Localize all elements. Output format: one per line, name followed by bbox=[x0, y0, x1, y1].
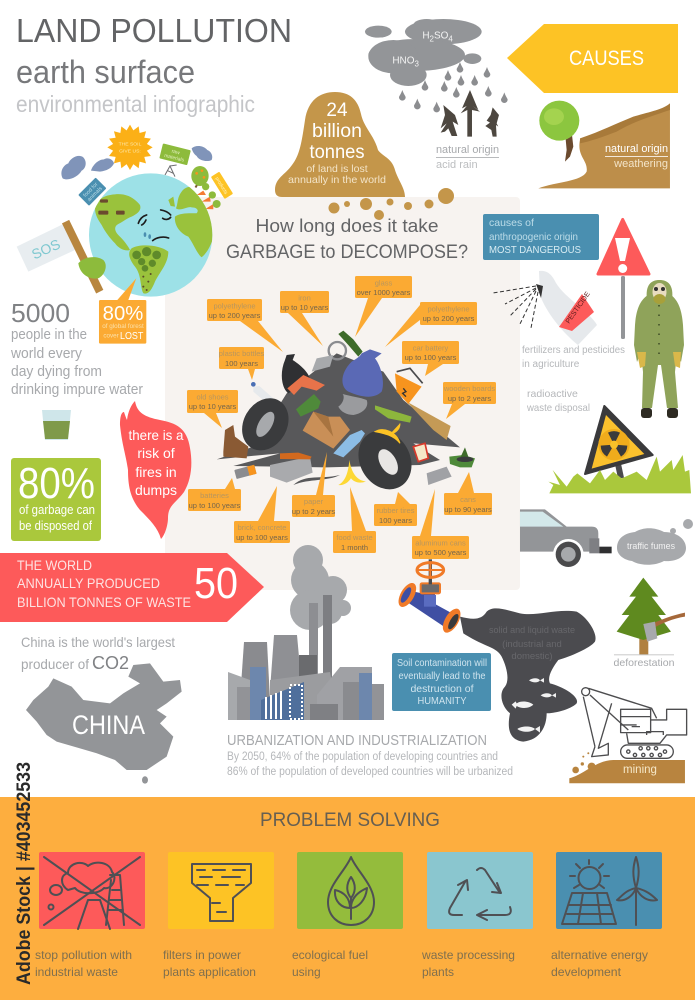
label: glass: over 1000 years bbox=[357, 288, 411, 297]
callout: 24 billion tonnes pile: tonnes bbox=[310, 142, 364, 163]
card: ecological fuel bbox=[292, 852, 403, 979]
caption: solid and liquid waste: solid and liquid waste bbox=[489, 625, 575, 636]
callout: 24 billion tonnes pile bbox=[275, 92, 454, 220]
flame: risk of fires: dumps bbox=[135, 482, 177, 498]
bricks bbox=[287, 375, 325, 395]
wooden boards bbox=[407, 402, 451, 440]
card: waste processing: plants bbox=[422, 965, 454, 979]
chemical formulas: SO bbox=[434, 31, 449, 42]
cattle bbox=[98, 199, 125, 215]
panel: soil contamination bbox=[392, 653, 491, 711]
panel heading: how long does it take: How long does it take bbox=[256, 216, 438, 236]
text: 5000 people bbox=[10, 298, 143, 398]
text: urbanization and industrialization: 86% of the population of developed countries will be urbanized bbox=[227, 766, 513, 778]
caption: radioactive waste disposal bbox=[526, 388, 590, 414]
card: waste processing: waste processing bbox=[421, 948, 515, 962]
banana on pile bbox=[375, 423, 400, 443]
panel: garbage decompose background bbox=[165, 197, 520, 590]
chemical formulas: 4 bbox=[448, 34, 453, 43]
panel: problem solving bbox=[0, 797, 695, 1000]
card: alternative energy bbox=[551, 852, 662, 979]
flame: risk of fires: fires in bbox=[135, 464, 177, 480]
panel heading: how long does it take bbox=[226, 216, 468, 263]
forest on south america bbox=[132, 247, 161, 272]
dead trees bbox=[441, 90, 499, 137]
icon: sun with text: THE SOIL bbox=[119, 142, 142, 148]
icon: radioactive sign in grass bbox=[548, 406, 691, 493]
label: paper: paper bbox=[304, 497, 324, 506]
plastic bottle bbox=[333, 430, 365, 457]
illustration: sad earth globe bbox=[17, 125, 233, 344]
green bottle bbox=[375, 405, 412, 423]
icon: pesticide spray bottle bbox=[493, 271, 597, 345]
panel: 80 percent garbage: of garbage can bbox=[19, 502, 95, 517]
callout: 24 billion tonnes pile: billion bbox=[312, 121, 362, 142]
sign: raw materials: raw bbox=[171, 149, 181, 156]
label: iron: up to 10 years bbox=[281, 303, 329, 312]
panel: causes of anthropogenic origin: MOST DANGEROUS bbox=[489, 244, 581, 256]
80 percent forest callout bbox=[99, 278, 146, 344]
label: rubber tires: 100 years bbox=[379, 516, 412, 525]
80 percent forest callout: 80% bbox=[103, 302, 143, 325]
label: brick, concrete bbox=[234, 486, 290, 543]
icon: oil derrick bbox=[165, 165, 177, 177]
caption: solid and liquid waste: (industrial and bbox=[502, 639, 562, 650]
caption: fertilizers and pesticides: in agriculture bbox=[522, 359, 580, 370]
card: waste processing bbox=[421, 852, 533, 979]
green open can bbox=[449, 447, 475, 467]
blue plastic bag bbox=[342, 349, 383, 397]
caption: natural origin acid rain: natural origin bbox=[436, 144, 499, 156]
card: ecological fuel: using bbox=[292, 965, 321, 979]
illustration: mining excavator bbox=[569, 688, 687, 783]
icon: blue clouds bbox=[61, 146, 212, 179]
text: urbanization and industrialization bbox=[227, 733, 513, 778]
banana peel bbox=[338, 460, 366, 485]
label: plastic bottles bbox=[219, 347, 264, 380]
sign: food for animals: food for bbox=[82, 182, 100, 199]
illustration: acid rain bbox=[365, 19, 508, 137]
80 percent forest callout: of global forest bbox=[102, 323, 144, 330]
label: batteries: up to 100 years bbox=[189, 501, 241, 510]
caption: solid and liquid waste: domestic) bbox=[511, 651, 553, 662]
crushed aluminum can bbox=[427, 467, 452, 485]
watermark: stock id: Adobe Stock | #403452533 bbox=[14, 762, 35, 985]
rain drops bbox=[399, 62, 508, 112]
title: environmental infographic bbox=[16, 91, 255, 117]
map: China bbox=[26, 663, 182, 784]
label: food waste: 1 month bbox=[341, 543, 368, 552]
caption: fertilizers and pesticides bbox=[522, 345, 625, 370]
card: ecological fuel: ecological fuel bbox=[292, 948, 368, 962]
label: aluminum cans: up to 500 years bbox=[415, 548, 467, 557]
label: old shoes bbox=[187, 390, 238, 428]
callout: 24 billion tonnes pile: 24 bbox=[326, 100, 348, 121]
label: wooden boards: wooden boards bbox=[443, 384, 495, 393]
text: 5000 people: drinking impure water bbox=[11, 382, 143, 398]
cooling towers bbox=[240, 642, 270, 700]
panel: causes of anthropogenic origin: causes of bbox=[489, 217, 534, 229]
figure: hazmat suit person bbox=[634, 280, 684, 418]
80 percent forest callout: cover bbox=[103, 332, 119, 339]
caption: mining: mining bbox=[623, 764, 657, 776]
sign: products bbox=[211, 172, 233, 199]
map: China: CHINA bbox=[72, 710, 145, 740]
label: brick, concrete: brick, concrete bbox=[238, 523, 286, 532]
caption: fertilizers and pesticides: fertilizers and pesticides bbox=[522, 345, 625, 356]
card: stop pollution bbox=[35, 852, 145, 979]
flame: risk of fires: there is a bbox=[128, 427, 184, 443]
icon: car bbox=[520, 509, 612, 570]
label: iron: iron bbox=[298, 294, 311, 302]
illustration: liquid waste pool bbox=[460, 608, 596, 742]
banner: 50 billion tonnes of waste: 50 bbox=[194, 559, 238, 608]
chimneys bbox=[309, 603, 318, 678]
label: cans: cans bbox=[460, 495, 476, 504]
label: plastic bottles: plastic bottles bbox=[219, 349, 264, 358]
card: stop pollution: industrial waste bbox=[35, 965, 118, 979]
label: cans bbox=[444, 472, 492, 515]
label: polyethylene: polyethylene bbox=[213, 302, 256, 310]
cloud: traffic fumes bbox=[617, 519, 693, 565]
label: glass: glass bbox=[375, 278, 393, 288]
iron wheel bbox=[329, 342, 346, 359]
card: stop pollution: stop pollution with bbox=[35, 948, 132, 962]
label: paper bbox=[292, 452, 335, 517]
label: batteries: batteries bbox=[200, 491, 229, 500]
chemical formulas: H bbox=[422, 31, 430, 42]
card: filters in power plants bbox=[163, 852, 274, 979]
globe body bbox=[89, 173, 212, 297]
caption: radioactive waste disposal: radioactive bbox=[527, 388, 578, 400]
panel: soil contamination: HUMANITY bbox=[418, 695, 466, 707]
right tyre bbox=[348, 421, 422, 499]
icon: sun with text: GIVE US: bbox=[119, 149, 141, 155]
caption: natural origin acid rain bbox=[436, 144, 499, 171]
banner: causes arrow: CAUSES bbox=[569, 47, 644, 70]
label: wooden boards bbox=[443, 382, 496, 419]
fish bbox=[512, 678, 556, 733]
label: aluminum cans bbox=[412, 489, 469, 559]
callout: 24 billion tonnes pile: annually in the world bbox=[288, 174, 386, 186]
illustration: deforestation bbox=[614, 578, 685, 655]
text: urbanization and industrialization: URBANIZATION AND INDUSTRIALIZATION bbox=[227, 733, 487, 749]
title: earth surface bbox=[16, 54, 195, 90]
uprooted tree bbox=[539, 101, 579, 162]
label: polyethylene: up to 200 years bbox=[209, 311, 261, 320]
text: China CO2: CO2 bbox=[92, 653, 129, 673]
label: food waste: food waste bbox=[336, 533, 373, 542]
flame: risk of fires bbox=[120, 401, 191, 539]
label: car battery bbox=[402, 341, 459, 376]
tears bbox=[144, 232, 151, 239]
icon: glass of dirty water bbox=[42, 410, 71, 440]
label: wooden boards: up to 2 years bbox=[448, 394, 491, 403]
panel: causes of anthropogenic origin bbox=[483, 214, 599, 260]
label: food waste bbox=[333, 487, 376, 553]
icon: pesticide spray bottle: PESTICIDE bbox=[565, 291, 592, 325]
label: aluminum cans: aluminum cans bbox=[415, 538, 466, 548]
sign: food for animals: animals bbox=[87, 186, 104, 203]
text: 5000 people: people in the bbox=[11, 327, 87, 343]
label: polyethylene second: up to 200 years bbox=[423, 314, 475, 323]
green tin can bbox=[296, 394, 321, 417]
label: batteries bbox=[188, 478, 241, 511]
card: alternative energy: development bbox=[551, 965, 622, 979]
formula HNO3: HNO bbox=[392, 56, 415, 67]
continents bbox=[95, 187, 215, 294]
brown bottle bbox=[280, 453, 312, 459]
banner: 50 billion tonnes of waste bbox=[0, 553, 264, 622]
label: rubber tires bbox=[374, 492, 417, 526]
card: alternative energy: alternative energy bbox=[551, 948, 648, 962]
small plastic bottle bbox=[251, 382, 273, 402]
caption: natural origin weathering bbox=[605, 143, 668, 170]
chemical formulas: 2 bbox=[430, 34, 435, 43]
icon: waste pipe with valve bbox=[395, 559, 464, 636]
banner: 50 billion tonnes of waste: ANNUALLY PRODUCED bbox=[17, 575, 160, 591]
acid cloud bbox=[365, 19, 482, 86]
illustration: garbage pile bbox=[217, 331, 475, 499]
label: cans: up to 90 years bbox=[444, 505, 492, 514]
label: old shoes: up to 10 years bbox=[189, 402, 237, 411]
text: China CO2: China is the world's largest bbox=[21, 634, 175, 650]
label: car battery: up to 100 years bbox=[405, 353, 457, 362]
sign: products: products bbox=[214, 176, 229, 196]
label: glass bbox=[355, 276, 412, 337]
panel: soil contamination: destruction of bbox=[410, 683, 474, 695]
sign: raw materials bbox=[159, 143, 191, 165]
caption: solid and liquid waste bbox=[489, 625, 575, 662]
text: China CO2: producer of bbox=[21, 656, 89, 672]
label: brick, concrete: up to 100 years bbox=[236, 533, 288, 542]
label: polyethylene second bbox=[385, 302, 477, 347]
sad face bbox=[138, 210, 171, 241]
pile of waste bbox=[217, 353, 460, 467]
black garbage bag bbox=[282, 354, 310, 393]
80 percent forest callout: LOST bbox=[120, 331, 143, 342]
SOS sign and hand: SOS bbox=[29, 236, 63, 262]
green glass bottle bbox=[338, 331, 363, 357]
callout: 24 billion tonnes pile: of land is lost bbox=[306, 163, 368, 175]
illustration: factory and city bbox=[228, 545, 384, 720]
caption: deforestation: deforestation bbox=[614, 657, 675, 669]
panel: soil contamination: Soil contamination will bbox=[397, 657, 487, 669]
SOS sign and hand bbox=[17, 220, 106, 293]
label: car battery: car battery bbox=[413, 344, 448, 352]
caption: natural origin weathering: weathering bbox=[613, 158, 668, 170]
car battery bbox=[395, 368, 423, 404]
heading: problem solving: PROBLEM SOLVING bbox=[260, 810, 440, 831]
panel: 80 percent garbage: 80% bbox=[18, 459, 95, 508]
formula HNO3: 3 bbox=[415, 59, 420, 68]
label: polyethylene bbox=[207, 299, 283, 352]
batteries bbox=[234, 465, 257, 479]
label: polyethylene second: polyethylene bbox=[427, 304, 470, 314]
banner: 50 billion tonnes of waste: BILLION TONNES OF WASTE bbox=[17, 594, 191, 610]
plant blocks bbox=[299, 655, 317, 680]
label: plastic bottles: 100 years bbox=[225, 359, 258, 368]
text: urbanization and industrialization: By 2050, 64% of the population of developing countries and bbox=[227, 751, 498, 763]
crushed metal can bbox=[338, 394, 367, 415]
sign: food for animals bbox=[78, 178, 106, 206]
label: rubber tires: rubber tires bbox=[377, 506, 415, 515]
panel: causes of anthropogenic origin: anthropogenic origin bbox=[489, 231, 578, 243]
panel: 80 percent garbage bbox=[11, 458, 101, 541]
caption: natural origin weathering: natural origin bbox=[605, 143, 668, 155]
apple core bbox=[413, 443, 428, 462]
smoke bbox=[290, 545, 351, 630]
sign: raw materials: materials bbox=[164, 153, 185, 164]
label: old shoes: old shoes bbox=[196, 392, 229, 402]
banner: causes arrow bbox=[507, 24, 678, 93]
icon: tree and carrots bbox=[191, 166, 221, 209]
text: China CO2 bbox=[21, 634, 175, 673]
concrete block bbox=[270, 457, 313, 483]
flame: risk of fires: risk of bbox=[137, 445, 175, 461]
title: LAND POLLUTION bbox=[16, 12, 292, 49]
text: 5000 people: 5000 bbox=[11, 298, 70, 328]
left tyre bbox=[233, 390, 298, 459]
illustration: weathering hillside bbox=[538, 101, 670, 188]
grass bbox=[548, 455, 691, 493]
caption: natural origin acid rain: acid rain bbox=[436, 159, 478, 171]
panel: 80 percent garbage: be disposed of bbox=[19, 518, 92, 533]
title bbox=[16, 12, 292, 117]
cloud: traffic fumes: traffic fumes bbox=[627, 541, 675, 552]
card: filters in power plants: plants application bbox=[163, 965, 256, 979]
label: paper: up to 2 years bbox=[292, 507, 335, 516]
icon: warning sign bbox=[598, 220, 649, 339]
icon: sun with text bbox=[107, 125, 153, 170]
panel heading: how long does it take: GARBAGE to DECOMPOSE? bbox=[226, 242, 468, 263]
text: 5000 people: world every bbox=[10, 346, 83, 362]
card: filters in power plants: filters in power bbox=[163, 948, 241, 962]
banner: 50 billion tonnes of waste: THE WORLD bbox=[17, 557, 92, 573]
text: 5000 people: day dying from bbox=[11, 364, 102, 380]
caption: radioactive waste disposal: waste disposal bbox=[526, 402, 590, 414]
cardboard box bbox=[303, 412, 350, 449]
panel: soil contamination: eventually lead to the bbox=[398, 670, 486, 682]
label: iron bbox=[280, 291, 329, 346]
old shoe bbox=[223, 425, 248, 458]
